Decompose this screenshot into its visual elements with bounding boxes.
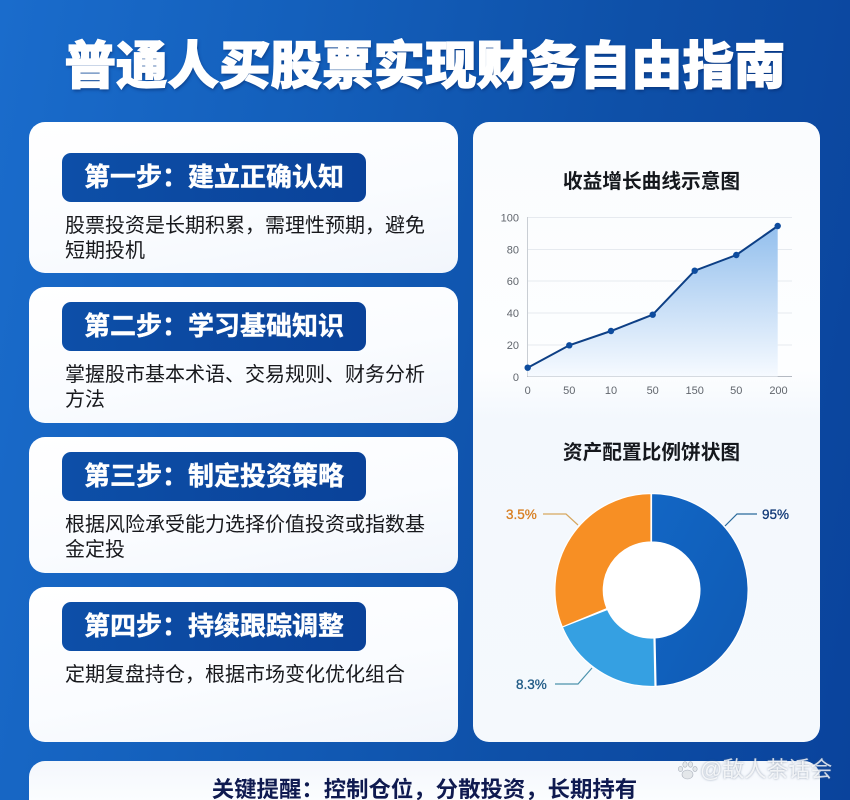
charts artwork (501, 170, 792, 692)
x axis labels: 50 (647, 385, 659, 397)
panel: step 3 (29, 437, 458, 573)
label: 8.3%: 8.3% (516, 677, 547, 692)
label: 95%: 95% (762, 507, 789, 522)
heading: step 1 (62, 153, 366, 202)
x axis labels: 50 (730, 385, 742, 397)
heading: donut chart: 资产配置比例饼状图 (563, 442, 740, 464)
text: step 2: 掌握股市基本术语、交易规则、财务分析方法 (65, 364, 425, 411)
x axis labels: 50 (563, 385, 575, 397)
panel: charts (473, 122, 820, 742)
x axis labels: 10 (605, 385, 617, 397)
line chart (501, 212, 792, 397)
panel: step 2 (29, 287, 458, 423)
panel: step 4 (29, 587, 458, 742)
segment: orange (555, 494, 651, 627)
x axis labels: 0 (525, 385, 531, 397)
watermark text: @敌人茶话会 (700, 757, 832, 782)
label: 3.5% (506, 507, 578, 525)
heading: step 3 (62, 452, 366, 501)
y axis labels: 0 (513, 372, 519, 384)
label: 95% (725, 507, 789, 526)
y axis labels (501, 212, 519, 384)
x axis labels: 200 (769, 385, 788, 397)
y axis labels: 20 (507, 340, 519, 352)
x axis labels (525, 385, 788, 397)
line series (528, 226, 778, 368)
panel: key reminder (29, 761, 820, 800)
segment: light blue (562, 610, 655, 686)
donut hole (604, 542, 700, 638)
x axis labels: 150 (686, 385, 704, 397)
y axis labels: 100 (501, 212, 519, 224)
heading: step 3: 第三步：制定投资策略 (84, 461, 344, 491)
panel: step 1 (29, 122, 458, 273)
y axis labels: 60 (507, 276, 519, 288)
donut chart (506, 493, 789, 692)
heading: step 2 (62, 302, 366, 351)
data points (524, 223, 781, 371)
segment: blue (652, 493, 748, 686)
icon: paw (678, 761, 698, 780)
text: step 1: 股票投资是长期积累，需理性预期，避免短期投机 (65, 215, 425, 262)
heading: line chart: 收益增长曲线示意图 (563, 170, 740, 193)
heading: step 4: 第四步：持续跟踪调整 (84, 611, 344, 641)
y axis labels: 40 (507, 308, 519, 320)
label: 8.3% (516, 668, 592, 692)
title: 普通人买股票实现财务自由指南 (64, 37, 786, 95)
watermark (678, 757, 832, 782)
text: step 3: 根据风险承受能力选择价值投资或指数基金定投 (65, 514, 425, 561)
label: 3.5%: 3.5% (506, 507, 537, 522)
area fill (528, 226, 778, 376)
heading: step 2: 第二步：学习基础知识 (84, 311, 344, 341)
heading: step 4 (62, 602, 366, 651)
text: step 4: 定期复盘持仓，根据市场变化优化组合 (65, 664, 405, 686)
y axis labels: 80 (507, 244, 519, 256)
heading: step 1: 第一步：建立正确认知 (84, 162, 344, 192)
